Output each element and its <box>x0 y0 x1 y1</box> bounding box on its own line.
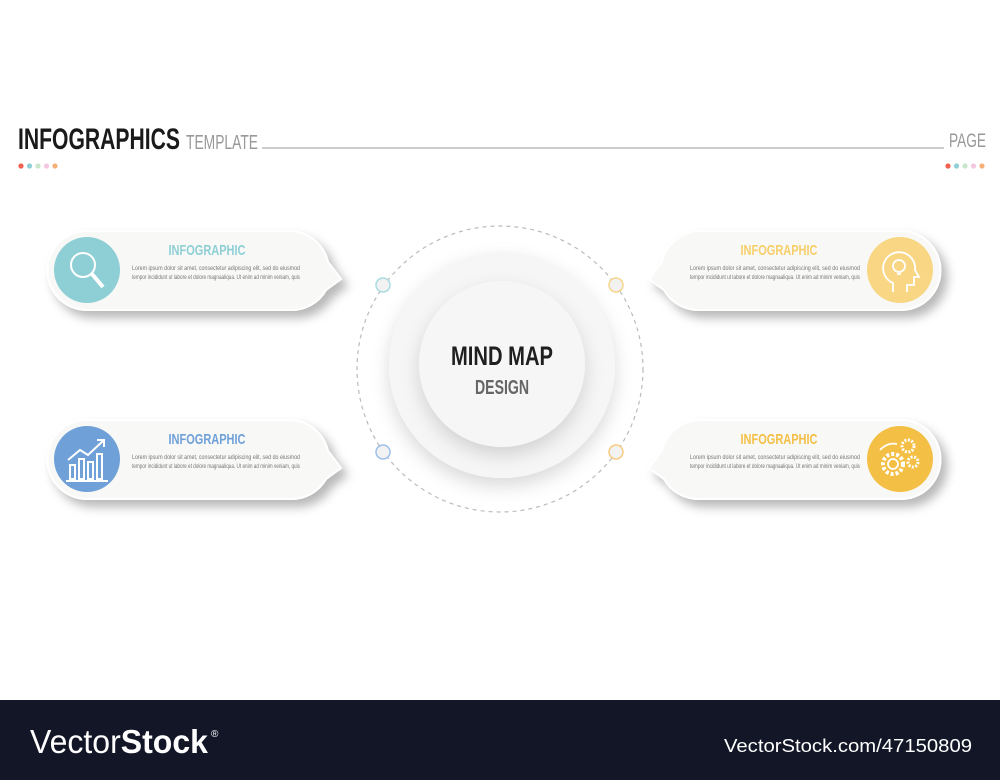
panel: top right: tempor incididunt ut labore et dolore magnaaliqua. Ut enim ad minim veniam, quis <box>690 275 860 281</box>
connector dots <box>376 278 623 459</box>
icon: head with bulb <box>883 252 919 292</box>
panel: top right <box>649 231 940 310</box>
panel: bottom left: tempor incididunt ut labore et dolore magnaaliqua. Ut enim ad minim veniam, quis <box>132 464 300 470</box>
panel: bottom right: tempor incididunt ut labore et dolore magnaaliqua. Ut enim ad minim veniam, quis <box>690 464 860 470</box>
panel: bottom right <box>649 420 940 499</box>
footer bar: VectorStock.com/47150809 <box>724 736 972 756</box>
panel: top left: Lorem ipsum dolor sit amet, consectetur adipiscing elit, sed do eiusmod <box>132 266 300 272</box>
center mind map: MIND MAP <box>451 341 553 371</box>
panel: top right: Lorem ipsum dolor sit amet, consectetur adipiscing elit, sed do eiusmod <box>690 266 860 272</box>
panel: top right: INFOGRAPHIC <box>740 242 818 259</box>
panel: top left: tempor incididunt ut labore et dolore magnaaliqua. Ut enim ad minim veniam, quis <box>132 275 300 281</box>
dots left <box>18 163 58 169</box>
icon: gears <box>880 440 918 474</box>
center mind map <box>357 226 643 512</box>
panel: bottom right: INFOGRAPHIC <box>740 431 818 448</box>
center mind map: DESIGN <box>475 377 529 399</box>
page label: PAGE <box>949 131 986 152</box>
title: TEMPLATE <box>186 132 258 154</box>
panel: bottom right: Lorem ipsum dolor sit amet, consectetur adipiscing elit, sed do eiusmod <box>690 455 860 461</box>
title: INFOGRAPHICS <box>18 123 180 156</box>
icon: bar chart <box>66 440 108 481</box>
icon: magnifier <box>71 253 103 287</box>
footer bar: ® <box>211 729 219 740</box>
panel: bottom left: INFOGRAPHIC <box>168 431 246 448</box>
footer bar: VectorStock <box>30 723 209 760</box>
dots right <box>945 163 985 169</box>
panel: top left <box>48 231 341 310</box>
panel: bottom left <box>48 420 341 499</box>
panel: top left: INFOGRAPHIC <box>168 242 246 259</box>
panel: bottom left: Lorem ipsum dolor sit amet, consectetur adipiscing elit, sed do eiusmod <box>132 455 300 461</box>
footer bar <box>0 700 1000 780</box>
